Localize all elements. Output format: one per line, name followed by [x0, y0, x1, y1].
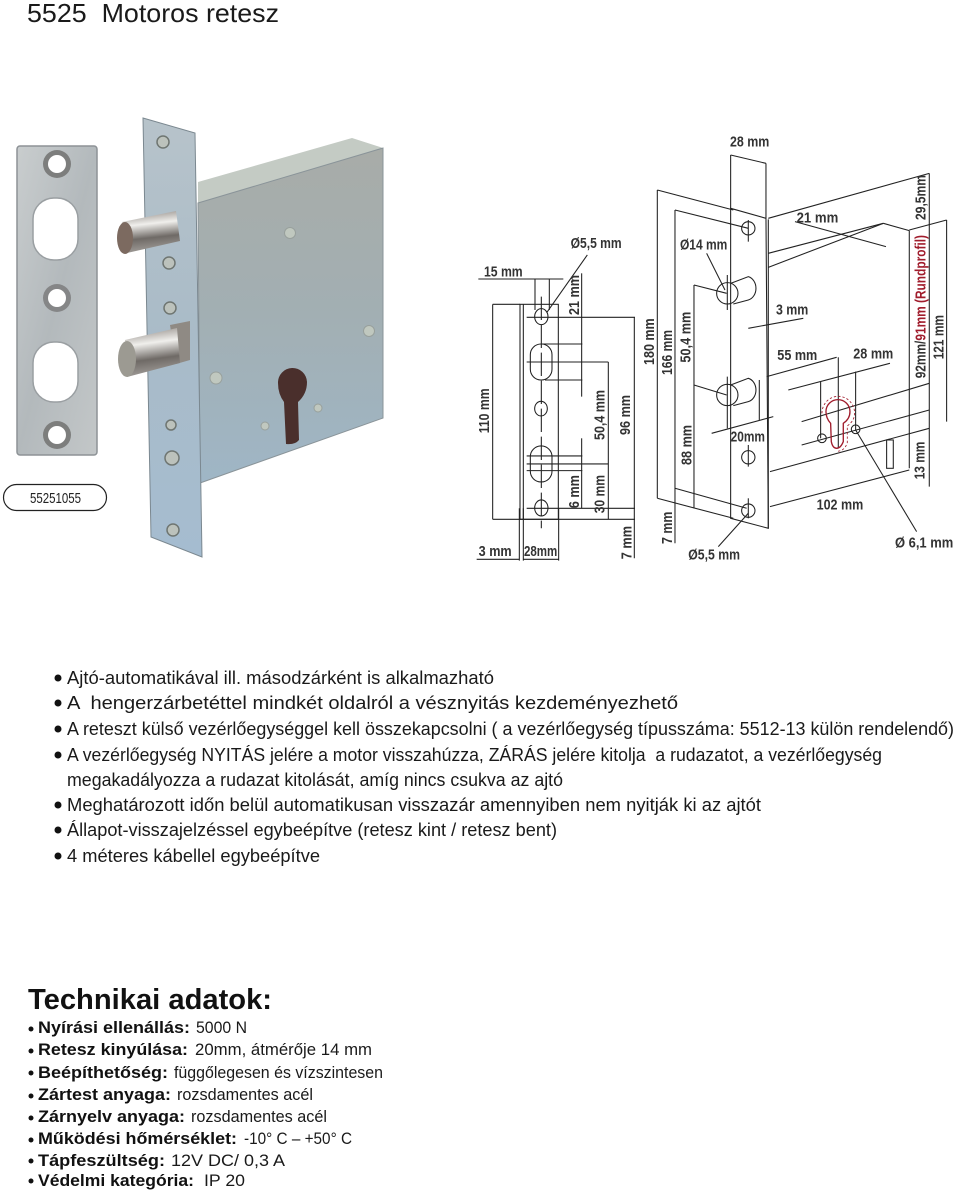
- dimension labels: 50,4 mm: [592, 390, 608, 440]
- photo: lock body: [117, 118, 383, 557]
- technical data list: rozsdamentes acél: [191, 1107, 327, 1126]
- feature list: Meghatározott időn belül automatikusan visszazár amennyiben nem nyitják ki az ajtót: [67, 795, 761, 815]
- dimension labels: 28mm: [524, 544, 557, 560]
- technical data list: Működési hőmérséklet:: [38, 1129, 237, 1148]
- side view lines: [477, 255, 635, 561]
- technical data list: rozsdamentes acél: [177, 1085, 313, 1104]
- dimension labels: Ø5,5 mm: [571, 236, 622, 252]
- technical data list: Beépíthetőség:: [38, 1063, 168, 1082]
- dimension labels: 30 mm: [592, 475, 608, 513]
- dimension labels: 3 mm: [776, 303, 808, 319]
- technical data list: 5000 N: [196, 1018, 247, 1037]
- technical data list: 20mm, átmérője 14 mm: [195, 1040, 372, 1059]
- dimension labels: 21 mm: [797, 211, 838, 227]
- dimension labels: 28 mm: [853, 347, 893, 363]
- dimension labels: 21 mm: [567, 275, 583, 315]
- feature list: megakadályozza a rudazat kitolását, amíg nincs csukva az ajtó: [67, 770, 563, 790]
- upper bolt: [117, 211, 180, 254]
- dimension labels: 6 mm: [567, 475, 583, 508]
- technical data list: IP 20: [204, 1171, 245, 1190]
- dimension labels: 55 mm: [777, 348, 817, 364]
- dimension labels: 13 mm: [913, 442, 929, 479]
- technical data list: Zártest anyaga:: [38, 1085, 171, 1104]
- dimension labels: 92mm/91mm (Rundprofil): [913, 235, 929, 378]
- technical drawing: [477, 135, 953, 563]
- dimension labels: 102 mm: [817, 497, 863, 513]
- dimension labels: 28 mm: [730, 135, 769, 151]
- technical data list: 12V DC/ 0,3 A: [171, 1151, 286, 1170]
- feature list: 4 méteres kábellel egybeépítve: [67, 846, 320, 866]
- dimension labels: [477, 135, 953, 563]
- technical data list: -10° C – +50° C: [244, 1129, 352, 1148]
- feature list: A vezérlőegység NYITÁS jelére a motor visszahúzza, ZÁRÁS jelére kitolja a rudazatot, a vezérlőegység: [67, 745, 882, 765]
- photo: strike plate: [17, 146, 97, 455]
- feature list: A reteszt külső vezérlőegységgel kell összekapcsolni ( a vezérlőegység típusszáma: 5512-13 külön rendelendő): [67, 719, 954, 739]
- dimension labels: 20mm: [731, 429, 765, 445]
- dimension labels: 50,4 mm: [679, 312, 695, 363]
- lower bolt: [118, 321, 190, 377]
- technical data list: [28, 1018, 383, 1190]
- dimension labels: 88 mm: [679, 425, 695, 465]
- dimension labels: Ø 6,1 mm: [895, 535, 953, 551]
- technical data list: Retesz kinyúlása:: [38, 1040, 188, 1059]
- dimension labels: 7 mm: [660, 512, 676, 544]
- dimension labels: 180 mm: [642, 318, 658, 365]
- dimension labels: 121 mm: [931, 315, 947, 359]
- dimension labels: 15 mm: [484, 265, 523, 281]
- keyhole: [278, 368, 307, 444]
- screws: [157, 136, 179, 536]
- technical data list: Tápfeszültség:: [38, 1151, 165, 1170]
- dimension labels: 96 mm: [618, 395, 634, 435]
- feature list: [54, 668, 954, 866]
- dimension labels: 166 mm: [660, 330, 676, 375]
- dimension labels: Ø5,5 mm: [688, 547, 740, 563]
- technical data list: függőlegesen és vízszintesen: [174, 1063, 383, 1082]
- box screws: [210, 228, 374, 430]
- dimension labels: Ø14 mm: [680, 237, 727, 253]
- dimension labels: 7 mm: [620, 526, 636, 559]
- feature list: Ajtó-automatikával ill. másodzárként is alkalmazható: [67, 668, 494, 688]
- product code label: 55251055: [30, 490, 81, 507]
- technical data list: Nyírási ellenállás:: [38, 1018, 190, 1037]
- perspective view lines: [657, 155, 947, 547]
- feature list: A hengerzárbetéttel mindkét oldalról a vésznyitás kezdeményezhető: [67, 692, 678, 713]
- dimension labels: 3 mm: [479, 544, 512, 560]
- technical data list: Zárnyelv anyaga:: [38, 1107, 185, 1126]
- dimension labels: 29,5mm: [913, 175, 929, 220]
- product code label: [4, 484, 106, 510]
- technical data list: Védelmi kategória:: [38, 1171, 194, 1190]
- feature list: Állapot-visszajelzéssel egybeépítve (retesz kint / retesz bent): [67, 820, 557, 840]
- heading: technical data: Technikai adatok:: [28, 984, 272, 1016]
- cylinder cutout: [822, 396, 855, 451]
- dimension labels: 110 mm: [477, 388, 493, 433]
